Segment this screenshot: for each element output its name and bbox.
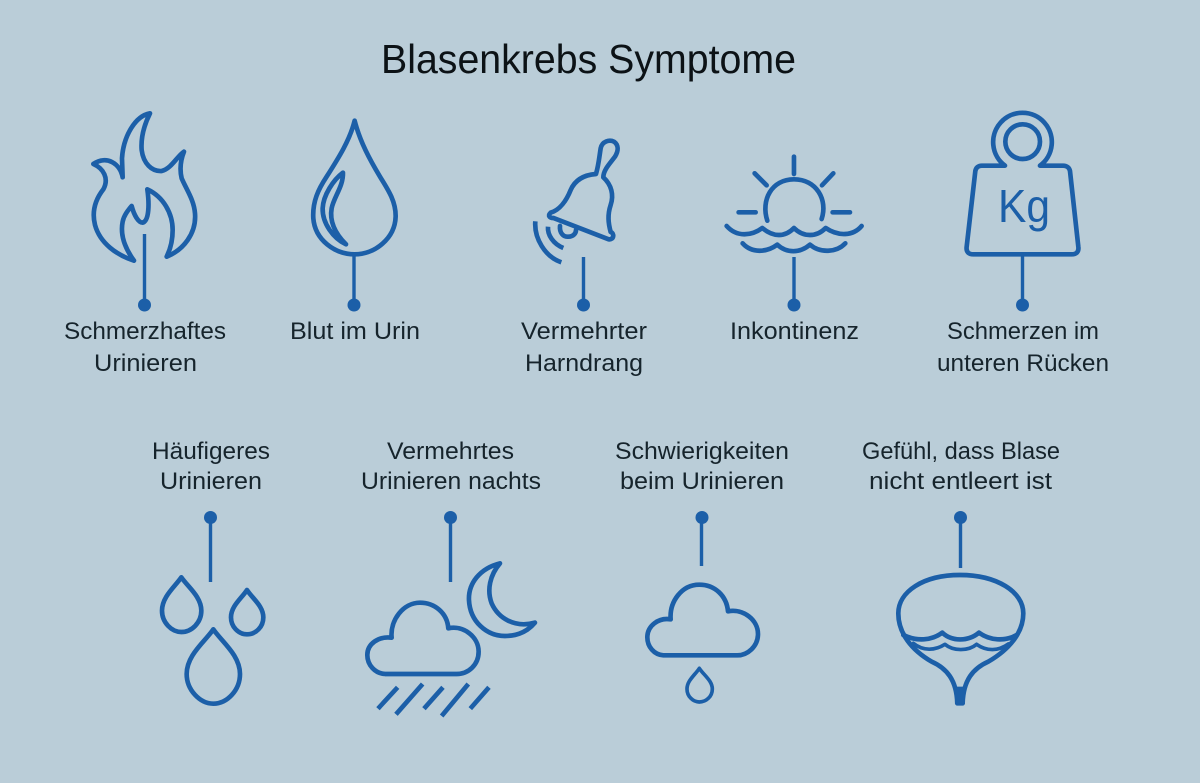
icon: blood drop bbox=[313, 121, 396, 254]
symptom: Inkontinenz bbox=[727, 157, 862, 345]
icon: cloud with single drop bbox=[647, 585, 758, 702]
label bbox=[937, 318, 1109, 377]
label: beim Urinieren bbox=[620, 468, 784, 495]
label bbox=[361, 438, 541, 495]
symptom: Schwierigkeiten beim Urinieren bbox=[615, 438, 789, 702]
symptom: Gefühl, dass Blase nicht entleert ist bbox=[862, 438, 1060, 704]
symptom: Blut im Urin bbox=[290, 121, 420, 345]
kg text: Kg bbox=[998, 180, 1050, 232]
pin line and dot bbox=[954, 511, 967, 568]
label: Schmerzen im bbox=[947, 318, 1099, 345]
symptom: Vermehrtes Urinieren nachts bbox=[361, 438, 541, 716]
pin line and dot bbox=[696, 511, 708, 566]
pin line and dot bbox=[138, 234, 151, 312]
label: Urinieren nachts bbox=[361, 468, 541, 495]
symptom: Schmerzen im unteren Rücken bbox=[937, 113, 1109, 377]
label: Blut im Urin bbox=[290, 318, 420, 345]
icon: flame bbox=[93, 113, 195, 261]
symptom: Vermehrter Harndrang bbox=[521, 141, 647, 377]
icon: sun over waves bbox=[727, 157, 862, 251]
label bbox=[615, 438, 789, 495]
icon: three drops bbox=[162, 577, 263, 704]
title: Blasenkrebs Symptome bbox=[381, 36, 796, 82]
pin line and dot bbox=[788, 257, 800, 312]
pin line and dot bbox=[204, 511, 217, 582]
label: Vermehrter bbox=[521, 318, 647, 345]
pin line and dot bbox=[1016, 256, 1029, 312]
icon: bell bbox=[535, 141, 618, 262]
symptom: Häufigeres Urinieren bbox=[152, 438, 270, 704]
pin line and dot bbox=[444, 511, 457, 582]
label: Inkontinenz bbox=[730, 318, 859, 345]
label: Häufigeres bbox=[152, 438, 270, 465]
label bbox=[152, 438, 270, 495]
icon: kg weight bbox=[967, 113, 1078, 254]
label: Urinieren bbox=[94, 350, 197, 377]
label: Schmerzhaftes bbox=[64, 318, 226, 345]
label: Urinieren bbox=[160, 468, 262, 495]
label: Vermehrtes bbox=[387, 438, 514, 465]
label bbox=[64, 318, 226, 377]
label: unteren Rücken bbox=[937, 350, 1109, 377]
label: Gefühl, dass Blase bbox=[862, 438, 1060, 465]
symptom: Schmerzhaftes Urinieren bbox=[64, 113, 226, 377]
pin line and dot bbox=[577, 257, 590, 312]
label bbox=[862, 438, 1060, 495]
label: nicht entleert ist bbox=[869, 468, 1052, 495]
label: Harndrang bbox=[525, 350, 643, 377]
icon: cloud, moon and rain bbox=[367, 563, 535, 716]
label bbox=[521, 318, 647, 377]
pin line and dot bbox=[348, 256, 360, 312]
icon: bladder bbox=[898, 575, 1023, 704]
label: Schwierigkeiten bbox=[615, 438, 789, 465]
